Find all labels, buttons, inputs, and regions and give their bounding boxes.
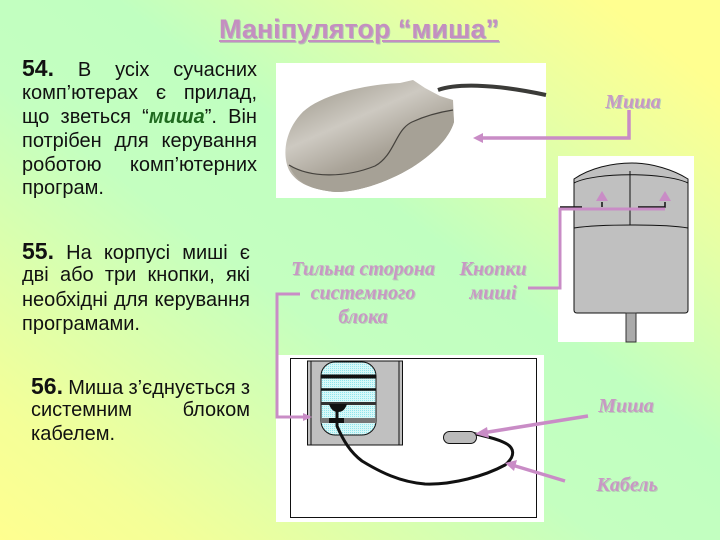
arrow: mouse label to small mouse — [475, 416, 588, 438]
icon: cable — [337, 408, 513, 484]
text block: item 55: 55. На корпусі миші є — [22, 238, 250, 264]
panel: mouse top-view diagram — [528, 156, 694, 342]
arrow: mouse label to photo — [473, 110, 629, 143]
title: Маніпулятор “миша” — [219, 14, 499, 44]
icon: mouse cable — [438, 86, 546, 95]
label: rear side of system unit: Тильна сторона — [291, 258, 435, 280]
label: mouse top: Миша — [605, 91, 661, 113]
text block: item 56 — [31, 373, 250, 445]
text block: item 54: 54. В усіх сучасних — [22, 55, 257, 81]
text block: item 54: програм. — [22, 177, 104, 199]
panel: mouse photo — [276, 63, 546, 198]
text block: item 55: дві або три кнопки, які — [22, 264, 250, 286]
label: mouse buttons: миші — [469, 282, 517, 304]
text block: item 54: роботою комп’ютерних — [22, 154, 257, 176]
label: rear side of system unit — [291, 258, 436, 328]
text block: item 56: 56. Миша з’єднується з — [31, 373, 250, 399]
label: mouse buttons — [459, 258, 527, 304]
label: rear side of system unit: блока — [338, 306, 388, 328]
text block: item 54: що зветься “миша”. Він — [22, 106, 257, 128]
text block: item 56: кабелем. — [31, 423, 115, 445]
icon: small mouse — [444, 432, 476, 444]
arrow: cable label to cable — [505, 460, 565, 481]
text block: item 54 — [22, 55, 257, 199]
text block: item 54: комп’ютерах є прилад, — [22, 82, 257, 104]
panel: system unit rear diagram — [276, 355, 544, 522]
text block: item 54: потрібен для керування — [22, 130, 257, 152]
icon: connector — [329, 404, 347, 412]
text block: item 55: програмами. — [22, 313, 140, 335]
text block: item 55: необхідні для керування — [22, 289, 250, 311]
label: rear side of system unit: системного — [311, 282, 415, 304]
icon: mouse body — [285, 80, 454, 192]
label: cable: Кабель — [596, 474, 658, 496]
label: mouse bottom: Миша — [598, 395, 654, 417]
text block: item 55 — [22, 238, 250, 335]
icon: mouse lower shell — [289, 110, 454, 192]
text block: item 56: системним блоком — [31, 399, 250, 421]
arrow: buttons label to mouse buttons — [528, 191, 671, 288]
arrow: rear side label to system unit — [277, 294, 312, 421]
label: mouse buttons: Кнопки — [459, 258, 527, 280]
